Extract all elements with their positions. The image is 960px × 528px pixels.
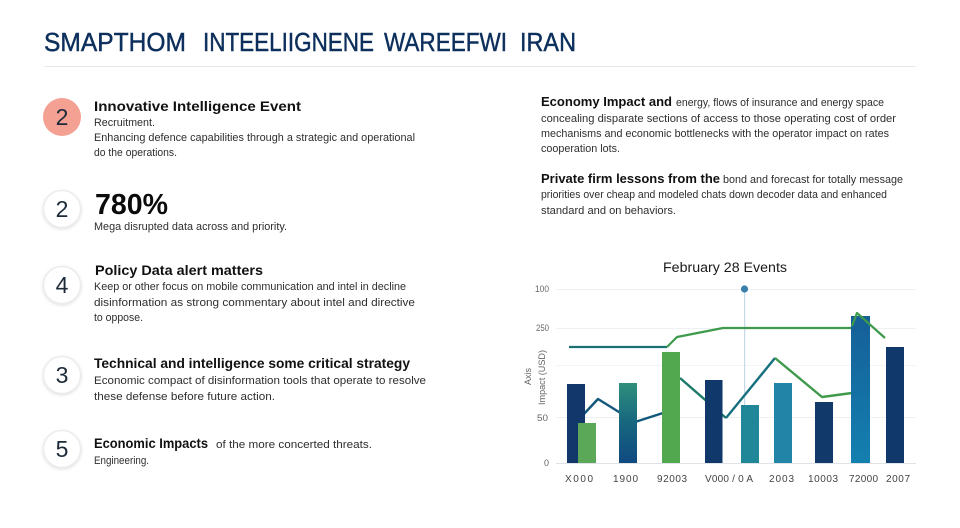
title	[44, 27, 576, 57]
icon: number badge 3	[44, 356, 80, 394]
item 1 text	[94, 98, 415, 159]
text block: economy impact paragraph: energy, flows of insurance and energy space	[676, 97, 884, 109]
text block: private firm paragraph	[541, 172, 903, 217]
upper line peak segment	[852, 313, 885, 338]
marker line and dot	[741, 285, 748, 463]
x axis labels: 2003	[769, 474, 794, 485]
item 2 text	[94, 189, 287, 233]
item 3 text: to oppose.	[94, 312, 143, 324]
y axis labels	[523, 284, 549, 468]
y axis labels: 0	[544, 458, 549, 468]
icon: number badge 3: 3	[56, 362, 68, 388]
item 1 text: Enhancing defence capabilities through a strategic and operational	[94, 132, 415, 144]
y axis labels: Axis	[523, 368, 533, 385]
y axis labels: Impact (USD)	[537, 350, 547, 405]
item 3 text: Policy Data alert matters	[95, 262, 263, 278]
item 5 text: Economic Impacts	[94, 435, 208, 451]
lower line series	[583, 358, 852, 422]
x axis labels: 72000	[849, 474, 878, 485]
x axis labels	[565, 474, 910, 485]
text block: private firm paragraph: Private firm lessons from the	[541, 172, 720, 186]
item 4 text: Technical and intelligence some critical strategy	[94, 355, 410, 371]
item 1: intelligence event	[43, 98, 415, 159]
item 2: 780% statistic	[44, 189, 287, 233]
icon: number badge 1	[43, 98, 81, 136]
item 3: policy	[44, 262, 415, 324]
item 5 text: Engineering.	[94, 455, 149, 467]
icon: number badge 1: 2	[56, 104, 68, 130]
item 1 text: do the operations.	[94, 147, 177, 159]
chart title: February 28 Events	[663, 260, 787, 275]
text block: economy impact paragraph: mechanisms and economic bottlenecks with the operator impact on rates	[541, 128, 889, 140]
title: INTEELIIGNENE	[203, 27, 374, 57]
item 3 text	[94, 262, 415, 324]
item 4: technical	[44, 355, 426, 403]
item 4 text: these defense before future action.	[94, 391, 275, 403]
item 5 text	[94, 435, 372, 467]
icon: number badge 2	[44, 190, 80, 228]
x axis labels: 10003	[808, 474, 838, 485]
item 3 text: disinformation as strong commentary about intel and directive	[94, 297, 415, 309]
x axis labels: X000	[565, 474, 593, 485]
icon: number badge 5	[44, 430, 80, 468]
item 1 text: Recruitment.	[94, 117, 155, 129]
icon: number badge 2: 2	[56, 196, 68, 222]
y axis labels: 50	[537, 413, 548, 423]
text block: private firm paragraph: bond and forecast for totally message	[723, 174, 903, 186]
chart: February 28 Events	[523, 260, 916, 485]
text block: economy impact paragraph: cooperation lots.	[541, 143, 620, 155]
item 5 text: of the more concerted threats.	[216, 439, 372, 451]
item 1 text: Innovative Intelligence Event	[94, 98, 301, 114]
icon: number badge 4	[44, 266, 80, 304]
text block: economy impact paragraph: Economy Impact and	[541, 95, 672, 109]
item 2 text: 780%	[95, 189, 168, 221]
y axis labels: 100	[535, 284, 549, 294]
panel: left list	[43, 98, 426, 468]
icon: number badge 5: 5	[56, 436, 68, 462]
item 5: economic impacts	[44, 430, 372, 468]
title: SMAPTHOM	[44, 27, 186, 57]
text block: private firm paragraph: standard and on behaviors.	[541, 205, 676, 217]
title: WAREEFWI	[384, 27, 507, 57]
text block: economy impact paragraph: concealing disparate sections of access to those operating cost of order	[541, 113, 896, 125]
item 4 text	[94, 355, 426, 403]
text block: private firm paragraph: priorities over cheap and modeled chats down decoder data and enhanced	[541, 189, 887, 201]
item 2 text: Mega disrupted data across and priority.	[94, 221, 287, 233]
upper line series	[569, 328, 852, 347]
y axis labels: 250	[536, 323, 549, 333]
title: IRAN	[520, 27, 576, 57]
x axis labels: 92003	[657, 474, 687, 485]
icon: number badge 4: 4	[56, 272, 69, 298]
item 3 text: Keep or other focus on mobile communication and intel in decline	[94, 281, 406, 293]
text block: economy impact paragraph	[541, 95, 896, 155]
bars	[567, 316, 904, 463]
x axis labels: V000 / 0 A	[705, 474, 753, 485]
item 4 text: Economic compact of disinformation tools that operate to resolve	[94, 375, 426, 387]
x axis labels: 2007	[886, 474, 910, 485]
x axis labels: 1900	[613, 474, 638, 485]
